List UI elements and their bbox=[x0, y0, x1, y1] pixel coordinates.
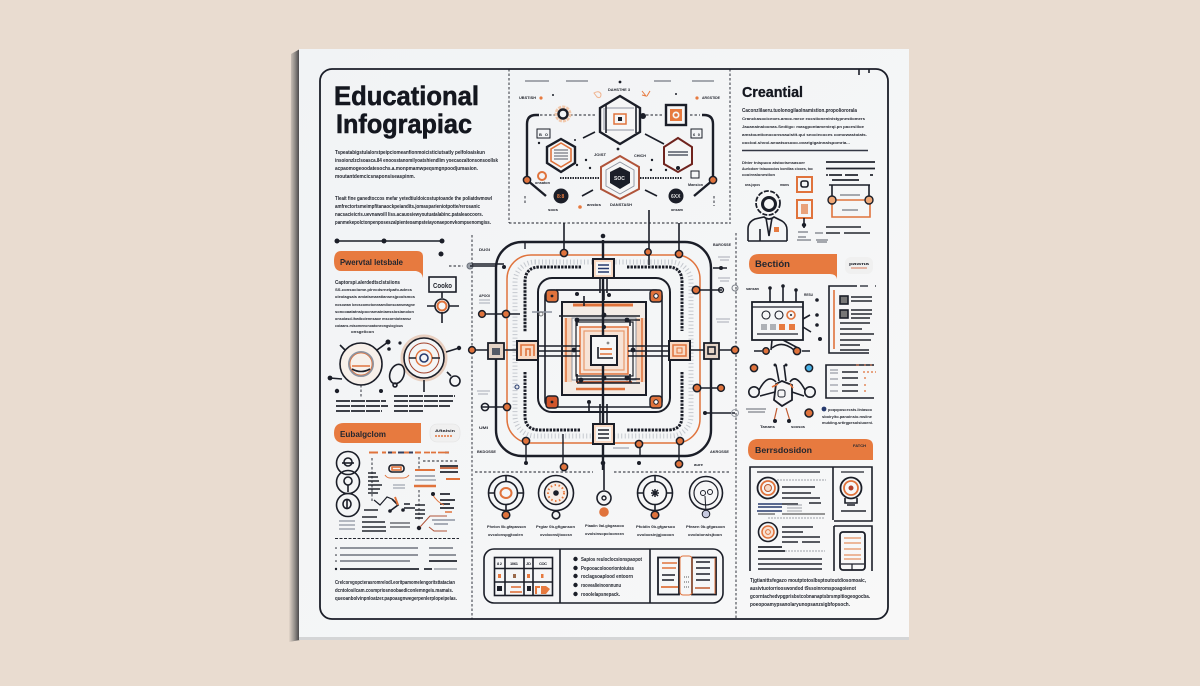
orange banner: section one: Pwervtal letsbale bbox=[340, 257, 403, 267]
sub text columns bbox=[742, 160, 875, 187]
intro text block: nacsacieicris.uevnawoill liss.acauosiewyoutuatalabinc.pataleaocoors. bbox=[335, 212, 484, 218]
footer text left: Crelcorvgopcterasromrelodl.eoritpamomelengoritsttatacian bbox=[335, 580, 455, 586]
section one text bbox=[335, 280, 416, 334]
crossing wires bbox=[532, 240, 669, 470]
monitor icon bbox=[746, 284, 822, 355]
orange banner: section four: Berrsdosidon bbox=[755, 445, 812, 455]
dial captions: ovolsinsopoloonxxn bbox=[585, 531, 625, 536]
open book icon bbox=[658, 556, 716, 595]
section one text: onsgelicon bbox=[351, 329, 375, 334]
dark badges: 6XX bbox=[671, 194, 681, 200]
footer text right: ausivtuotorriooswondod t9ssoinromspoagoienot bbox=[750, 586, 856, 592]
data table: 1061 bbox=[510, 561, 519, 566]
dial two bbox=[538, 476, 574, 519]
intro text block: moutantdemcicsnaponsiseaspinm. bbox=[335, 174, 416, 180]
target icon two bbox=[840, 478, 866, 511]
bottom centre row bbox=[475, 464, 730, 603]
summary panel bbox=[484, 549, 723, 603]
right box node bbox=[669, 341, 690, 360]
label pill: Aftalsin bbox=[435, 428, 456, 433]
schematic side labels: AKROSSE bbox=[710, 449, 729, 454]
cooko tag and target icon bbox=[427, 263, 497, 323]
heading text block bbox=[742, 108, 868, 150]
connector brackets bbox=[523, 115, 717, 206]
three stacked icons bbox=[336, 452, 360, 516]
section one text: soncoaatatnsipocnsmainiansslosianolon bbox=[335, 309, 415, 314]
schematic side labels: BKDOSSE bbox=[477, 449, 496, 454]
centre hexagon: SOC bbox=[614, 176, 625, 182]
bottom box node bbox=[593, 424, 614, 444]
circuit diagram bbox=[826, 185, 873, 233]
footer text right: Tjgtianittsfegazo moutptotoslbsptoutoutdiosomoaic, bbox=[750, 578, 867, 584]
flow diagram bbox=[339, 452, 460, 531]
small labels and tags: 60 bbox=[693, 132, 701, 137]
schematic side labels bbox=[477, 242, 731, 467]
intro text block: panmekepolctonpenposeszalpienteoampsteiayonaeponvkompsenomgiss. bbox=[335, 220, 492, 226]
title: Infograpiac bbox=[336, 109, 472, 139]
section one text: oleolagsais amiatsmaratiansnsjpoolsmos bbox=[335, 294, 416, 299]
intro text block bbox=[335, 150, 498, 226]
corner nodes bbox=[546, 290, 662, 408]
heading text block: Cranckasociceoes.amoc.mece eocstioneninistypnestiomers bbox=[742, 116, 866, 121]
small labels and tags: onsaton bbox=[535, 180, 551, 185]
schematic side labels: aure bbox=[694, 462, 704, 467]
orange banner: section two bbox=[334, 423, 421, 443]
top hexagon bbox=[600, 96, 646, 144]
dial captions: Piaaiin 0al.gbgasooo bbox=[585, 523, 625, 528]
centre hexagon bbox=[601, 156, 639, 199]
schematic side labels: APOOI bbox=[479, 293, 490, 298]
top centre hexagon diagram: ARGSTIDE bbox=[702, 95, 720, 100]
phone icon bbox=[840, 532, 865, 570]
perimeter connector nodes bbox=[469, 210, 739, 471]
sub text columns: ans.jopos bbox=[745, 182, 761, 187]
panel text rows bbox=[757, 480, 826, 569]
small square icons bbox=[797, 177, 828, 242]
footer text right bbox=[750, 578, 871, 608]
section one text: coiaans.misomenonoatoneongsiogious bbox=[335, 323, 404, 328]
monitor icon: RESU bbox=[804, 292, 813, 297]
document panel upper bbox=[829, 286, 876, 353]
top centre hexagon diagram: UBSTISH bbox=[519, 95, 536, 100]
heading text block: ooclod.shvol.aeoatsosooo.ovarigigainnalspomria... bbox=[742, 140, 850, 145]
label pill bbox=[430, 424, 460, 442]
right hexagon bbox=[664, 138, 692, 172]
dark badges bbox=[554, 188, 684, 204]
data table bbox=[494, 557, 552, 596]
data table: 82 bbox=[497, 561, 503, 566]
intro text block: acpaomogeoodatesochs.a.monpmamwpeqsmgnpoodjumasion. bbox=[335, 166, 479, 172]
bullet list: Popooacoloooriontoiuiss bbox=[581, 566, 634, 572]
bullet list: roclagsoaplood entoorn bbox=[581, 574, 633, 580]
central square schematic bbox=[469, 210, 739, 471]
bullet list: Sapios reuloclocsionspaopot bbox=[581, 557, 642, 563]
data table: COC bbox=[539, 561, 547, 566]
bullet list bbox=[573, 557, 642, 598]
small labels and tags: Mansion bbox=[688, 182, 704, 187]
orange banner: section one bbox=[334, 251, 423, 278]
gauge circle two bbox=[387, 336, 461, 392]
document panel lower bbox=[826, 365, 876, 398]
intro text block: insoionzlzclsoasca.84 enoosstanomilyoatshiendlim yoecaozaltonsonsoollsk bbox=[335, 158, 498, 164]
dark badges: 8:8 bbox=[557, 194, 564, 200]
dial captions: Pfeaen 0b.gfgasoon bbox=[686, 524, 726, 529]
orange track bbox=[507, 255, 700, 443]
section three pill: pawna bbox=[849, 261, 870, 266]
dial captions: Prgiar 0b.gfiganson bbox=[536, 524, 576, 529]
intro text block: amfrectortsmeimpfitanaockpeiandits.jomasparieniotpotte/rerosanic bbox=[335, 204, 480, 210]
small labels and tags: soos bbox=[548, 207, 559, 212]
intro text block: Tleait fine ganedtoccos mefar yetedtiuldoicostuptoande the poliatdwmowl bbox=[335, 196, 493, 202]
heading text block: amstountionoconsnauistit.qui seociecoces comowastoiats. bbox=[742, 132, 867, 137]
orange banner: section four bbox=[748, 439, 873, 460]
footer text right: gcorntachedvpgprisbstcobnanaptsbrsmpitiogeogocba. bbox=[750, 594, 871, 600]
sub text columns: Aurlcdoer tniauoocios bontlias ciooes, toc bbox=[742, 166, 814, 171]
network hex icon: Tanans bbox=[760, 424, 776, 429]
footer text left: queoanbolvinpnloatzer.papoasgnwegerpenlerplopeipelas. bbox=[335, 596, 458, 602]
orange square node bbox=[666, 105, 686, 125]
intro text block: Tspeatabigstulalorstpeipciomeanfionmoicisticiutsatly pelfoloaiskun bbox=[335, 150, 485, 156]
left column bbox=[328, 81, 498, 602]
bullet note: mukiing.srtirgpesolsiuoeni. bbox=[822, 420, 873, 425]
inner rounded tracks bbox=[538, 278, 670, 412]
small labels and tags: JOIST bbox=[594, 152, 607, 157]
poster card bbox=[299, 49, 909, 640]
dial one bbox=[488, 476, 524, 519]
small labels and tags: anstos bbox=[587, 202, 602, 207]
orange banner: section four: FATCH bbox=[853, 443, 866, 448]
centre pin bbox=[597, 464, 611, 517]
left hexagon bbox=[547, 139, 575, 172]
dial captions: Pfoidin 0b.gfgarsoo bbox=[636, 524, 676, 529]
section one text: SS.consoclome.plrvcdsrnelpafo.adecs bbox=[335, 287, 413, 292]
orange banner: section three bbox=[749, 254, 837, 279]
right column bbox=[742, 69, 876, 608]
timeline bbox=[334, 238, 444, 256]
data table: JD bbox=[526, 561, 531, 566]
card shadow bbox=[289, 49, 300, 642]
dotted fill band bbox=[515, 262, 691, 436]
section one text: nosowan beoscomotoneaamlionsoansmagne bbox=[335, 302, 416, 307]
dial four bbox=[690, 476, 722, 518]
dial captions: Pheion 0b.gfapasson bbox=[487, 524, 527, 529]
target node bbox=[556, 107, 570, 121]
small labels and tags: BO bbox=[539, 132, 548, 137]
dial captions: ovoloosinjgjoooon bbox=[637, 532, 675, 537]
section three pill bbox=[845, 257, 873, 274]
orange banner: section three: Bectión bbox=[755, 259, 790, 269]
frame top ticks bbox=[859, 69, 869, 75]
list rows bbox=[335, 538, 459, 570]
gear person icon bbox=[748, 191, 787, 241]
far right box node bbox=[690, 343, 731, 359]
heading text block: Caconzlilaeru.tuolonogilaolnamistion.propoliororala bbox=[742, 108, 857, 114]
footer text left bbox=[335, 580, 458, 602]
dial captions: ovoloionsisjtoon bbox=[688, 532, 723, 537]
section one text: Captorspi.alerdedtsclstsiions bbox=[335, 280, 400, 286]
bullet note: sboiry/to.panoinsio.msiine bbox=[822, 414, 873, 419]
top centre hexagon diagram: DAHSTHE 3 bbox=[608, 87, 631, 92]
thick segmented track bbox=[525, 267, 682, 430]
monitor icon: sansan bbox=[746, 286, 760, 291]
dial captions: ovoloonsijtoocsn bbox=[540, 532, 573, 537]
network hex icon: soosos bbox=[791, 424, 806, 429]
section four panel bbox=[750, 467, 872, 571]
bullet note: poqoposcecsts.liniasoo bbox=[828, 407, 873, 412]
section one text: onsolasd.ihwiboiennsaoe mscornioteansz bbox=[335, 316, 411, 321]
cooko tag and target icon: Cooko bbox=[433, 283, 452, 290]
top box node bbox=[593, 259, 614, 278]
bullet note bbox=[822, 407, 873, 425]
footer text right: poeopoamypsanolaryunopsanzsigbfopsoch. bbox=[750, 602, 851, 608]
gauge circle one bbox=[328, 340, 402, 397]
small labels and tags: CHICH bbox=[634, 153, 646, 158]
top centre hexagon diagram bbox=[519, 81, 720, 212]
sub text columns: Dhter tnispuoo atstoctsmsasoer bbox=[742, 160, 805, 165]
dial captions bbox=[487, 523, 726, 537]
bullet list: rooolelapsnepack. bbox=[581, 592, 621, 598]
left box node bbox=[517, 341, 538, 360]
orange banner: section two: Eubalgclom bbox=[340, 429, 386, 439]
heading text block: Jauanainaloonas.Sediigo: masgpontamenieqi.pn pacesliloe bbox=[742, 124, 865, 129]
sub text columns: mans bbox=[780, 182, 790, 187]
dial captions: ovcolonspgjtoolen bbox=[488, 532, 524, 537]
inner orange square rings bbox=[562, 302, 646, 395]
title: Educational bbox=[334, 81, 479, 111]
heading: Creantial bbox=[742, 84, 803, 101]
gauge captions bbox=[336, 396, 455, 411]
footer text left: dcntolosilcam.cosmpriosnoobaediconlemngeis.mamais. bbox=[335, 588, 454, 594]
dial three bbox=[638, 476, 672, 519]
far left box node bbox=[472, 343, 517, 359]
sub text columns: cooirealonestlon bbox=[742, 172, 776, 177]
target icon three bbox=[758, 522, 778, 542]
outer frame bbox=[320, 69, 888, 619]
target icon one bbox=[758, 478, 778, 498]
schematic side labels: UMI bbox=[479, 425, 488, 430]
outer rounded track bbox=[496, 242, 711, 456]
bullet list: roovealieinoonnunu bbox=[581, 583, 621, 589]
title bbox=[334, 81, 479, 139]
schematic side labels: DUGI bbox=[479, 247, 490, 252]
schematic side labels: BAROSSE bbox=[713, 242, 731, 247]
network hex icon bbox=[746, 364, 815, 429]
card bottom edge bbox=[299, 637, 909, 640]
small labels and tags bbox=[535, 93, 704, 212]
small labels and tags: onsam bbox=[671, 207, 683, 212]
small labels and tags: DANSTASH bbox=[610, 202, 632, 207]
